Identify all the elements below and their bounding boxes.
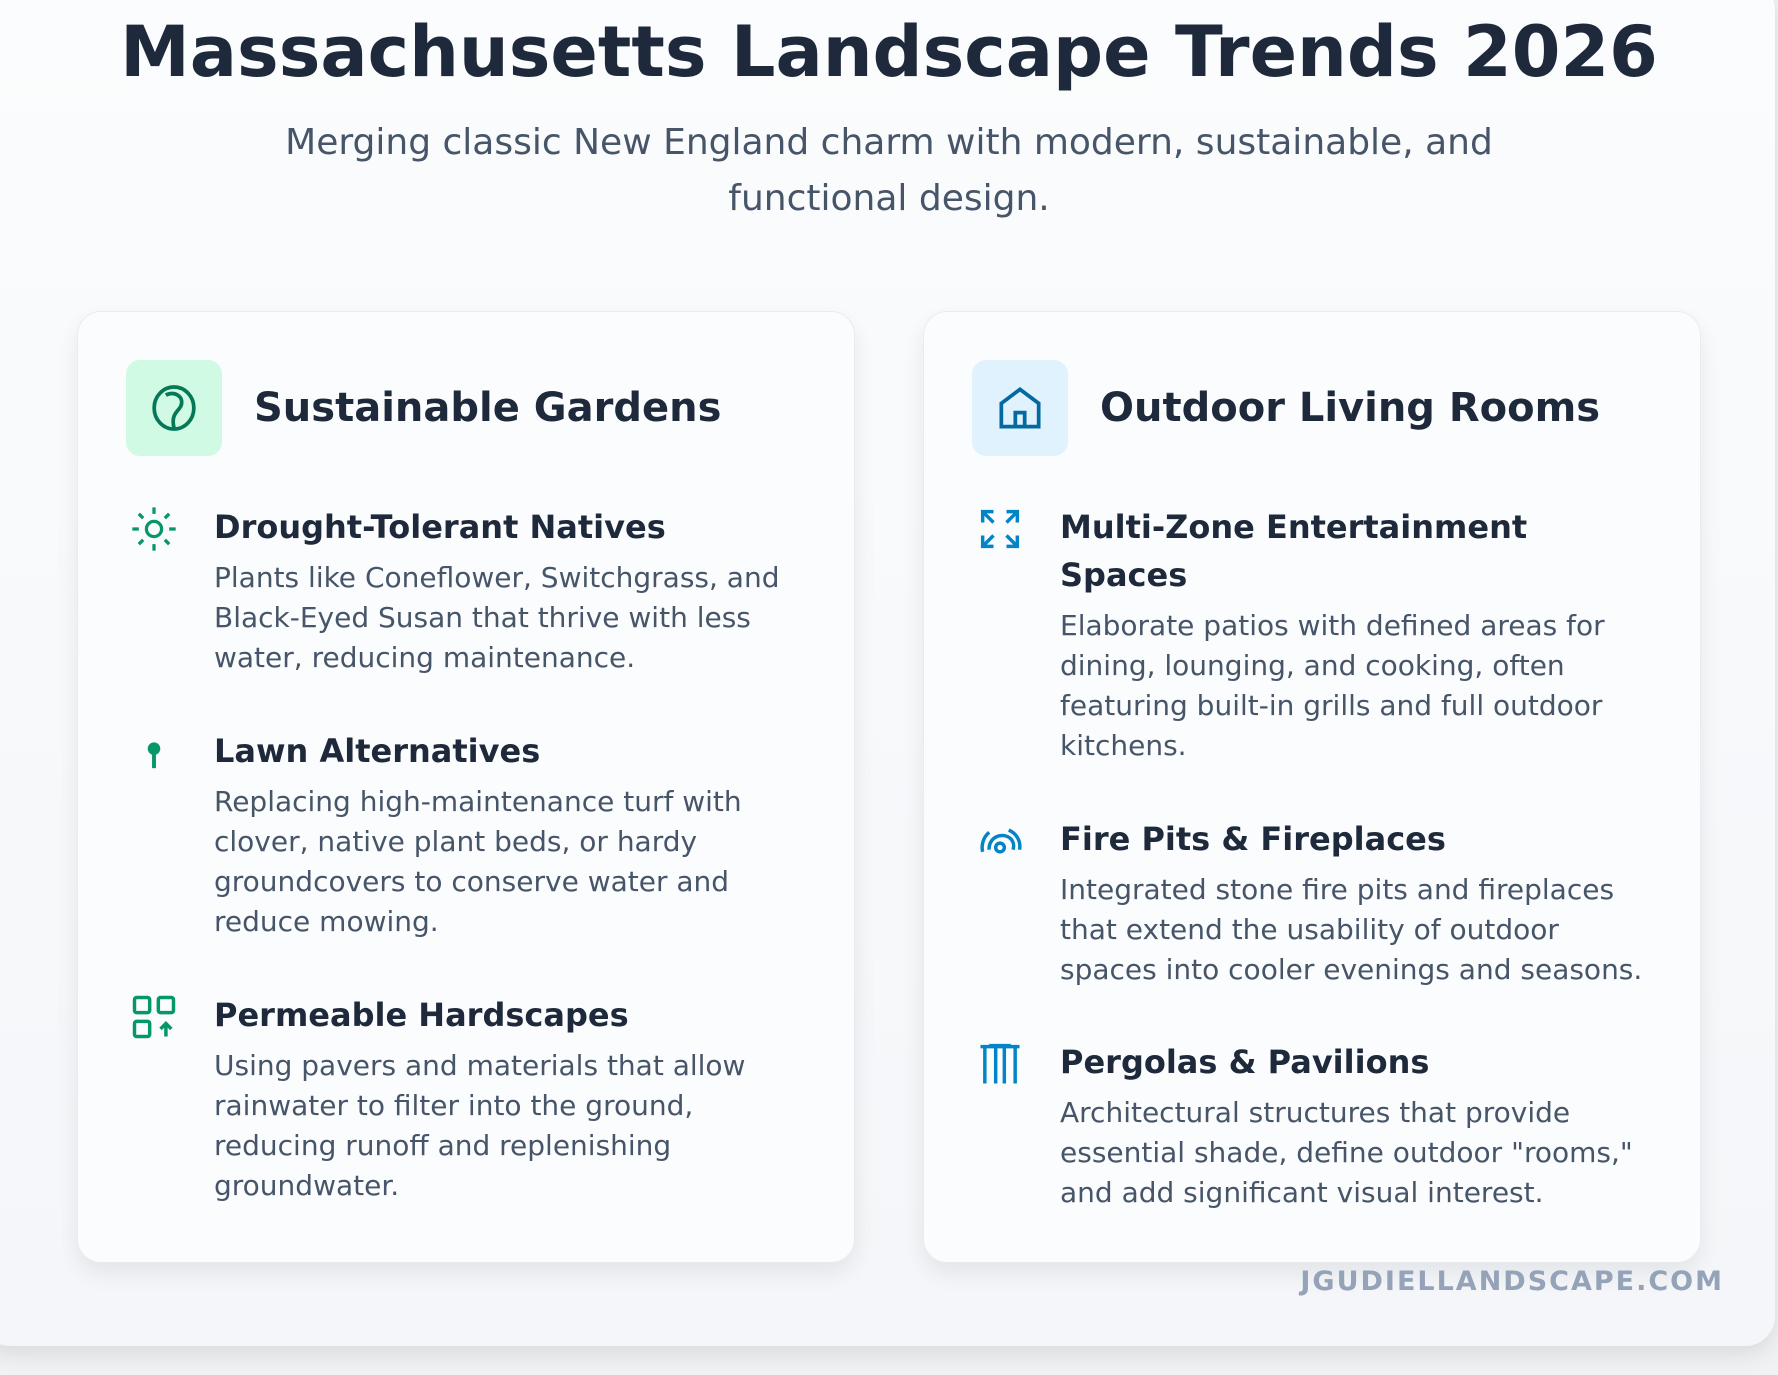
title: Massachusetts Landscape Trends 2026 [120, 11, 1658, 93]
item: permeable hardscapes [132, 996, 745, 1202]
item: multi-zone: Elaborate patios with defined areas for dining, lounging, and cooking, often featuring built-in grills and full outdoor kitchens. [1060, 609, 1605, 762]
item: drought-tolerant natives: Drought-Tolerant Natives [214, 508, 666, 546]
footer brand: JGUDIELLANDSCAPE.COM [1300, 1266, 1724, 1297]
item: fire pits: Fire Pits & Fireplaces [1060, 820, 1446, 858]
item: fire pits [980, 820, 1642, 986]
subtitle: Merging classic New England charm with modern, sustainable, and functional design. [285, 122, 1493, 219]
item: lawn alternatives [148, 732, 742, 938]
item: drought-tolerant natives [132, 507, 779, 674]
item: fire pits: Integrated stone fire pits and fireplaces that extend the usability of outdoor spaces into cooler evenings and seasons. [1060, 873, 1642, 986]
item: pergolas: Pergolas & Pavilions [1060, 1043, 1429, 1081]
icon: house [972, 360, 1068, 456]
item: permeable hardscapes: Permeable Hardscapes [214, 996, 629, 1034]
icon: expand arrows [980, 510, 1020, 548]
icon: sun [132, 507, 176, 551]
item: multi-zone: Multi-Zone Entertainment Spaces [1060, 508, 1527, 594]
heading: Sustainable Gardens [254, 385, 721, 431]
icon: sprout [148, 742, 160, 768]
panel: outdoor living rooms [923, 311, 1701, 1263]
icon: leaf [126, 360, 222, 456]
heading: Outdoor Living Rooms [1100, 385, 1600, 431]
icon: grid [132, 996, 176, 1038]
item: pergolas [980, 1043, 1633, 1209]
item: drought-tolerant natives: Plants like Coneflower, Switchgrass, and Black-Eyed Susan that thrive with less water, reducing maintenance. [214, 561, 779, 674]
item: lawn alternatives: Lawn Alternatives [214, 732, 540, 770]
item: multi-zone [980, 508, 1605, 762]
panel: sustainable gardens [77, 311, 855, 1263]
icon: pergola [980, 1044, 1020, 1084]
icon: fire signal [980, 828, 1022, 854]
item: permeable hardscapes: Using pavers and materials that allow rainwater to filter into the ground, reducing runoff and replenishing groundwater. [214, 1049, 745, 1202]
item: lawn alternatives: Replacing high-maintenance turf with clover, native plant beds, or hardy groundcovers to conserve water and reduce mowing. [214, 785, 742, 938]
item: pergolas: Architectural structures that provide essential shade, define outdoor "rooms," and add significant visual interest. [1060, 1096, 1633, 1209]
